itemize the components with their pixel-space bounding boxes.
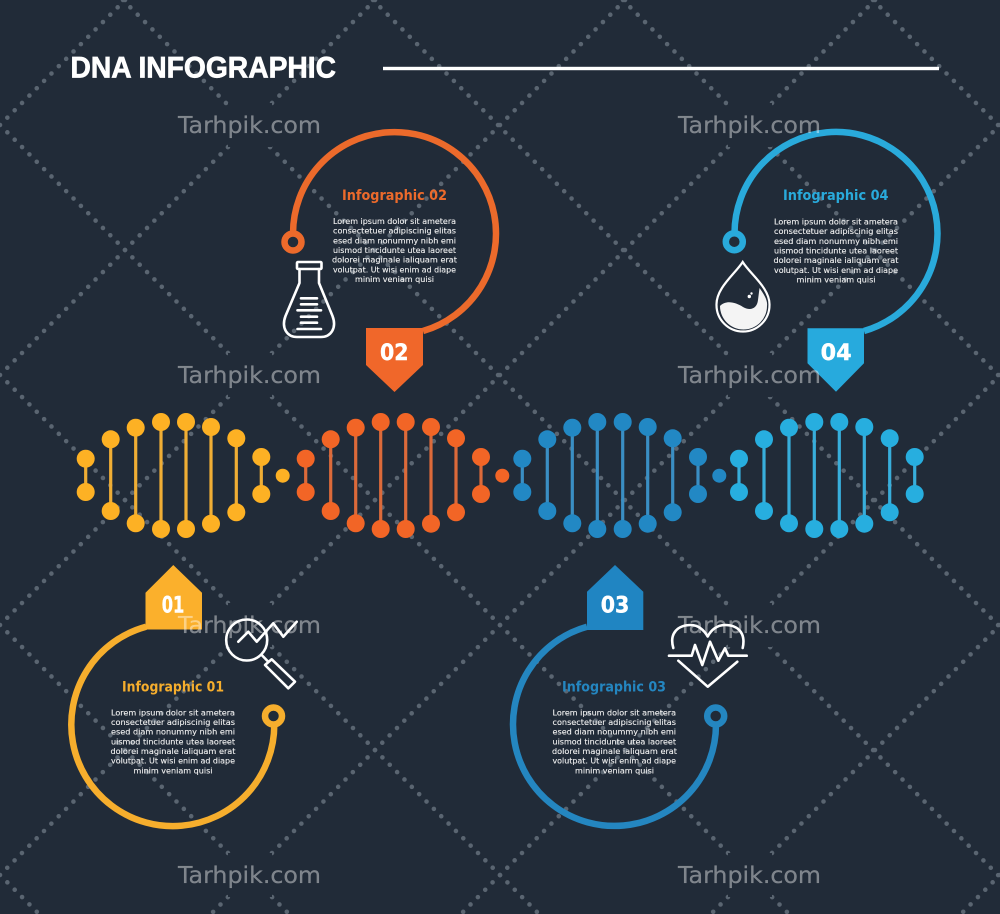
panel: infographic 02 xyxy=(284,132,496,392)
watermark text: Tarhpik.com xyxy=(677,113,821,139)
body text 03: esed diam nonummy nibh emi xyxy=(552,727,676,737)
watermark text: Tarhpik.com xyxy=(177,613,321,639)
ring end node 04 xyxy=(726,233,743,250)
ring connector 02 xyxy=(293,132,496,331)
icon: flask xyxy=(284,262,334,337)
heading 02: Infographic 02 xyxy=(342,188,447,204)
ring connector 01 xyxy=(71,627,274,826)
body text 04: esed diam nonummy nibh emi xyxy=(774,236,898,246)
body text 03: dolorei maginale ialiquam erat xyxy=(552,746,678,756)
body text 01: Lorem ipsum dolor sit ametera xyxy=(111,707,235,717)
panel: infographic 03 xyxy=(513,565,747,826)
body text 01: uismod tincidunte utea laoreet xyxy=(111,736,236,746)
body text 01: esed diam nonummy nibh emi xyxy=(111,727,235,737)
body text 03 xyxy=(552,707,678,775)
body text 01: minim veniam quisi xyxy=(134,765,212,775)
icon: water drop xyxy=(716,262,770,332)
body text 02 xyxy=(332,216,458,284)
watermark text: Tarhpik.com xyxy=(677,363,821,389)
body text 04: consectetuer adipiscinig elitas xyxy=(774,226,898,236)
title: DNA INFOGRAPHIC xyxy=(70,52,336,84)
ring end node 02 xyxy=(284,234,302,250)
heading 01: Infographic 01 xyxy=(122,680,224,696)
body text 01: consectetuer adipiscinig elitas xyxy=(111,717,235,727)
helix segment: orange xyxy=(297,413,509,538)
number tag 01: 01 xyxy=(162,594,184,619)
body text 04: volutpat. Ut wisi enim ad diape xyxy=(774,265,898,275)
body text 02: uismod tincidunte utea laoreet xyxy=(333,245,457,255)
body text 02: esed diam nonummy nibh emi xyxy=(333,235,456,245)
body text 01 xyxy=(110,707,236,775)
body text 01: dolorei maginale ialiquam erat xyxy=(110,746,236,756)
body text 03: minim veniam quisi xyxy=(575,765,654,775)
body text 02: volutpat. Ut wisi enim ad diape xyxy=(333,264,456,274)
DNA helix xyxy=(77,413,924,538)
heading 03: Infographic 03 xyxy=(562,680,666,696)
body text 04: minim veniam quisi xyxy=(796,274,876,284)
helix segment: blue xyxy=(513,413,726,538)
watermark text: Tarhpik.com xyxy=(677,863,821,889)
body text 04: Lorem ipsum dolor sit ametera xyxy=(774,216,898,226)
body text 03: volutpat. Ut wisi enim ad diape xyxy=(552,756,676,766)
watermark text: Tarhpik.com xyxy=(677,613,821,639)
number tag 02: 02 xyxy=(380,341,408,366)
heading 04: Infographic 04 xyxy=(783,188,888,204)
body text 02: dolorei maginale ialiquam erat xyxy=(332,255,458,265)
ring end node 01 xyxy=(265,708,282,724)
panel: infographic 01 xyxy=(71,565,297,826)
title rule xyxy=(383,67,939,70)
panel: infographic 04 xyxy=(716,132,938,392)
body text 01: volutpat. Ut wisi enim ad diape xyxy=(111,756,235,766)
ring connector 04 xyxy=(734,132,938,331)
body text 02: consectetuer adipiscinig elitas xyxy=(333,226,456,236)
body text 02: Lorem ipsum dolor sit ametera xyxy=(333,216,456,226)
body text 03: uismod tincidunte utea laoreet xyxy=(552,736,677,746)
number tag 03 xyxy=(587,565,643,630)
number tag 04: 04 xyxy=(821,341,852,366)
body text 03: Lorem ipsum dolor sit ametera xyxy=(552,707,676,717)
icon: heart with pulse xyxy=(669,625,747,687)
ring connector 03 xyxy=(513,627,716,826)
body text 02: minim veniam quisi xyxy=(355,274,434,284)
body text 04: dolorei maginale ialiquam erat xyxy=(774,255,899,265)
watermark text: Tarhpik.com xyxy=(177,863,321,889)
icon: magnifier with chart xyxy=(226,620,297,688)
watermark text: Tarhpik.com xyxy=(177,363,321,389)
body text 04 xyxy=(774,216,899,284)
helix segment: yellow xyxy=(77,413,290,538)
ring end node 03 xyxy=(707,708,724,724)
body text 03: consectetuer adipiscinig elitas xyxy=(552,717,676,727)
number tag 04 xyxy=(808,328,864,392)
helix segment: light blue xyxy=(730,413,924,538)
body text 04: uismod tincidunte utea laoreet xyxy=(774,246,899,256)
number tag 01 xyxy=(146,565,202,630)
number tag 02 xyxy=(366,328,423,392)
number tag 03: 03 xyxy=(601,594,629,619)
watermark text: Tarhpik.com xyxy=(177,113,321,139)
watermark text xyxy=(177,113,821,889)
